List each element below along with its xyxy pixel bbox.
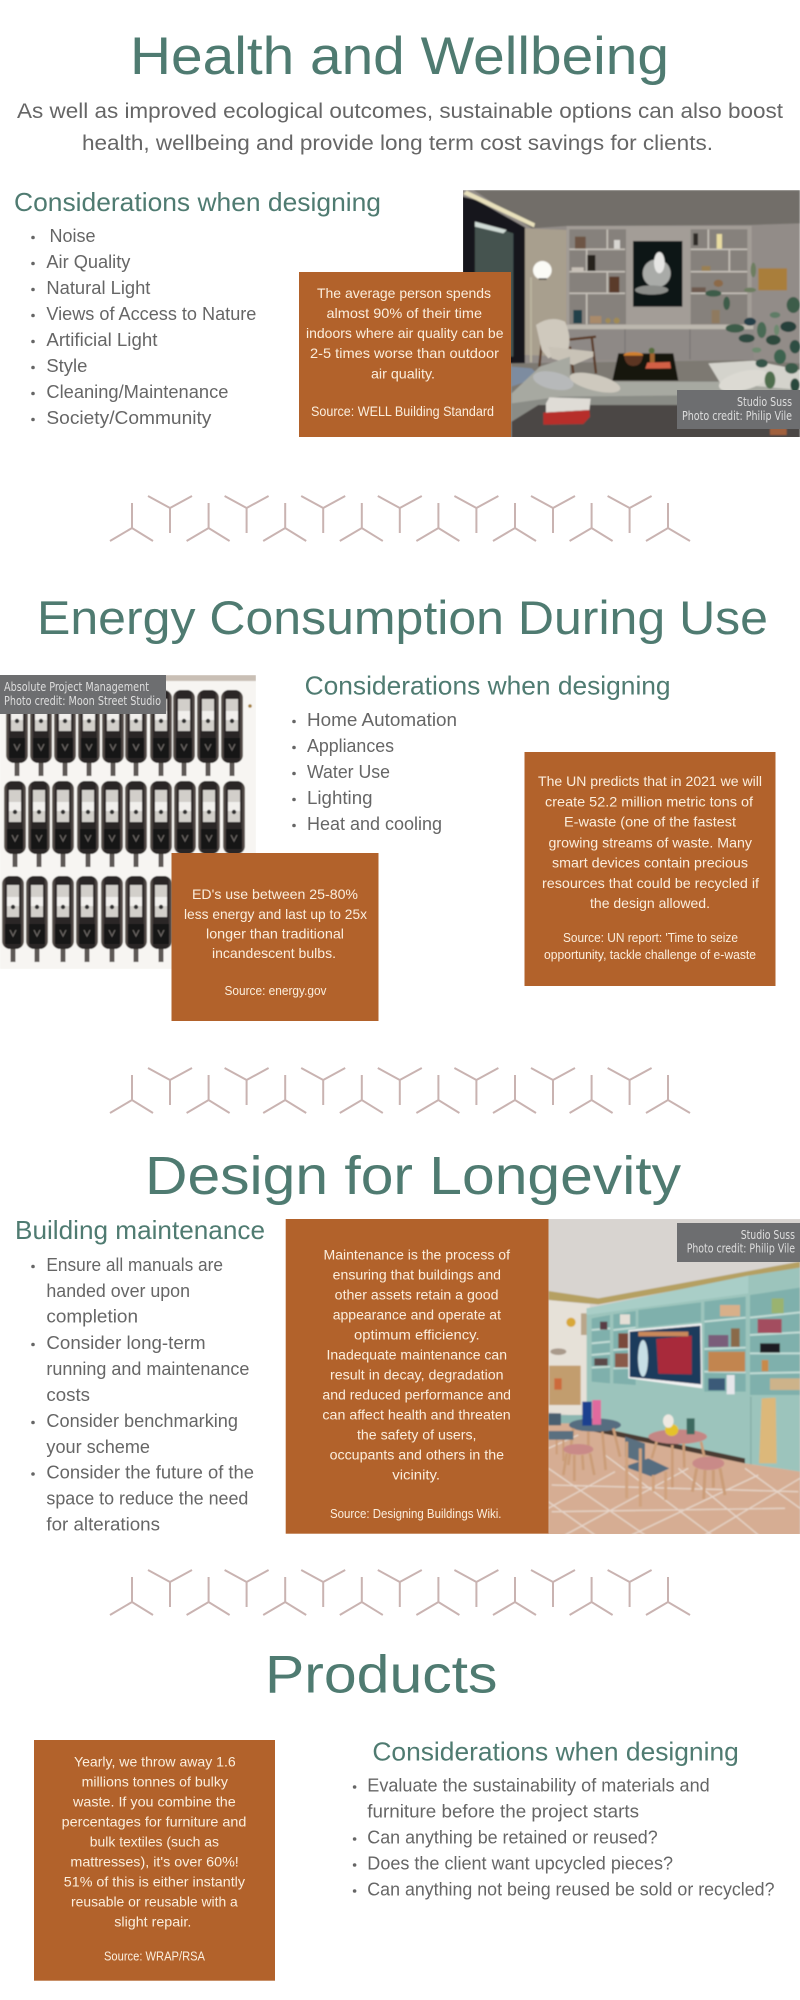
photo: wall of dimmer devices — [0, 675, 256, 969]
list: energy considerations: Heat and cooling — [307, 814, 442, 834]
list: health considerations: Noise — [50, 226, 96, 246]
list: health considerations: Cleaning/Maintenance — [46, 382, 228, 402]
list: building maintenance: running and maintenance — [46, 1359, 249, 1379]
list: energy considerations: Appliances — [307, 736, 394, 756]
list: building maintenance: costs — [46, 1385, 90, 1405]
list: health considerations — [31, 226, 256, 428]
callout: indoor air quality: Source: WELL Building Standard — [311, 403, 494, 419]
photo: living room — [460, 190, 800, 438]
list: products considerations: Evaluate the sustainability of materials and — [367, 1776, 710, 1796]
list: products considerations: furniture before the project starts — [367, 1802, 639, 1822]
callout: bulky waste: 51% of this is either instantly — [64, 1874, 245, 1890]
callout: maintenance definition: appearance and operate at — [333, 1306, 501, 1322]
callout: UN e-waste: opportunity, tackle challenge of e-waste — [544, 947, 756, 962]
callout: bulky waste: reusable or reusable with a — [71, 1894, 238, 1910]
list: building maintenance: your scheme — [46, 1437, 150, 1457]
callout: maintenance definition — [286, 1219, 548, 1534]
list: building maintenance: Consider benchmarking — [46, 1411, 238, 1431]
photo caption: Absolute Project Management — [0, 675, 166, 714]
callout: LED energy use: incandescent bulbs. — [212, 945, 336, 961]
callout: maintenance definition: and reduced performance and — [322, 1386, 511, 1402]
callout: UN e-waste: create 52.2 million metric tons of — [545, 793, 753, 809]
photo caption: Studio Suss — [677, 1223, 800, 1262]
callout: maintenance definition: can affect health and threaten — [322, 1406, 511, 1422]
callout: UN e-waste: resources that could be recycled if — [542, 875, 759, 891]
callout: bulky waste: millions tonnes of bulky — [82, 1774, 228, 1790]
list: building maintenance: completion — [46, 1307, 138, 1327]
callout: bulky waste: waste. If you combine the — [72, 1794, 236, 1810]
list: building maintenance: Ensure all manuals are — [46, 1255, 223, 1275]
intro text: health, wellbeing and provide long term cost savings for clients. — [82, 132, 713, 155]
list: health considerations: Air Quality — [46, 252, 130, 272]
callout: indoor air quality: 2-5 times worse than outdoor — [310, 345, 499, 361]
photo caption: Studio Suss — [677, 390, 800, 429]
title: Health and Wellbeing: Health and Wellbeing — [130, 27, 669, 86]
list: building maintenance: handed over upon — [46, 1281, 190, 1301]
callout: bulky waste: bulk textiles (such as — [90, 1834, 219, 1850]
callout: LED energy use: less energy and last up to 25x — [184, 906, 367, 922]
list: energy considerations: Lighting — [307, 788, 372, 808]
callout: LED energy use — [172, 853, 378, 1021]
list: products considerations: Can anything not being reused be sold or recycled? — [367, 1880, 774, 1900]
callout: maintenance definition: Maintenance is the process of — [324, 1246, 510, 1262]
list: health considerations: Artificial Light — [46, 330, 157, 350]
callout: UN e-waste: the design allowed. — [590, 895, 710, 911]
heading: building maintenance: Building maintenance — [15, 1215, 265, 1245]
callout: maintenance definition: the safety of users, — [357, 1426, 476, 1442]
callout: maintenance definition: Source: Designing Buildings Wiki. — [330, 1506, 502, 1521]
callout: bulky waste: slight repair. — [114, 1914, 191, 1930]
list: building maintenance: for alterations — [46, 1515, 160, 1535]
callout: UN e-waste — [524, 752, 776, 986]
callout: maintenance definition: optimum efficiency. — [354, 1326, 480, 1342]
callout: UN e-waste: smart devices contain precious — [552, 854, 748, 870]
heading: considerations, energy: Considerations when designing — [305, 671, 671, 701]
title: Energy Consumption During Use: Energy Consumption During Use — [37, 591, 768, 644]
list: health considerations: Natural Light — [46, 278, 150, 298]
callout: maintenance definition: result in decay, degradation — [330, 1366, 504, 1382]
list: health considerations: Views of Access to Nature — [46, 304, 256, 324]
callout: maintenance definition: vicinity. — [392, 1466, 440, 1482]
intro text — [17, 100, 783, 155]
callout: bulky waste: mattresses), it's over 60%! — [70, 1854, 239, 1870]
list: energy considerations — [292, 710, 457, 834]
callout: LED energy use: longer than traditional — [206, 926, 344, 942]
callout: indoor air quality — [299, 272, 511, 437]
list: building maintenance: Consider the future of the — [46, 1463, 254, 1483]
callout: LED energy use: Source: energy.gov — [224, 983, 327, 998]
callout: indoor air quality: indoors where air quality can be — [306, 325, 504, 341]
heading: considerations, products: Considerations when designing — [372, 1737, 739, 1767]
callout: UN e-waste: Source: UN report: 'Time to seize — [563, 930, 738, 945]
list: energy considerations: Home Automation — [307, 710, 457, 730]
callout: UN e-waste: E-waste (one of the fastest — [564, 813, 736, 829]
list: energy considerations: Water Use — [307, 762, 390, 782]
callout: maintenance definition: ensuring that buildings and — [333, 1266, 501, 1282]
title: Products: Products — [265, 1646, 498, 1705]
divider pattern — [110, 1570, 690, 1615]
list: products considerations: Can anything be retained or reused? — [367, 1828, 658, 1848]
list: products considerations — [353, 1776, 774, 1900]
callout: maintenance definition: other assets retain a good — [335, 1286, 498, 1302]
callout: UN e-waste: growing streams of waste. Many — [548, 834, 752, 850]
callout: indoor air quality: The average person spends — [317, 285, 491, 301]
intro text: As well as improved ecological outcomes, sustainable options can also boost — [17, 100, 783, 123]
callout: maintenance definition: occupants and others in the — [330, 1446, 504, 1462]
divider pattern — [110, 496, 690, 541]
heading: considerations, health: Considerations when designing — [14, 187, 381, 217]
list: products considerations: Does the client want upcycled pieces? — [367, 1854, 673, 1874]
list: building maintenance — [31, 1255, 254, 1535]
callout: bulky waste — [34, 1740, 275, 1981]
callout: UN e-waste: The UN predicts that in 2021 we will — [538, 773, 762, 789]
divider pattern — [110, 1068, 690, 1113]
callout: bulky waste: Yearly, we throw away 1.6 — [74, 1754, 236, 1770]
list: building maintenance: Consider long-term — [46, 1333, 206, 1353]
callout: indoor air quality: almost 90% of their time — [326, 305, 482, 321]
callout: indoor air quality: air quality. — [371, 366, 435, 382]
callout: LED energy use: ED's use between 25-80% — [192, 886, 358, 902]
callout: maintenance definition: Inadequate maintenance can — [326, 1346, 507, 1362]
list: building maintenance: space to reduce the need — [46, 1489, 248, 1509]
photo: playroom with mint cabinets — [545, 1218, 800, 1535]
photo caption: Absolute Project Management: Photo credit: Moon Street Studio — [4, 694, 161, 708]
callout: bulky waste: Source: WRAP/RSA — [104, 1949, 205, 1964]
photo caption: Absolute Project Management: Absolute Project Management — [4, 680, 149, 694]
list: health considerations: Society/Community — [46, 408, 211, 428]
title: Design for Longevity: Design for Longevity — [145, 1146, 681, 1206]
callout: bulky waste: percentages for furniture and — [62, 1814, 246, 1830]
list: health considerations: Style — [46, 356, 87, 376]
